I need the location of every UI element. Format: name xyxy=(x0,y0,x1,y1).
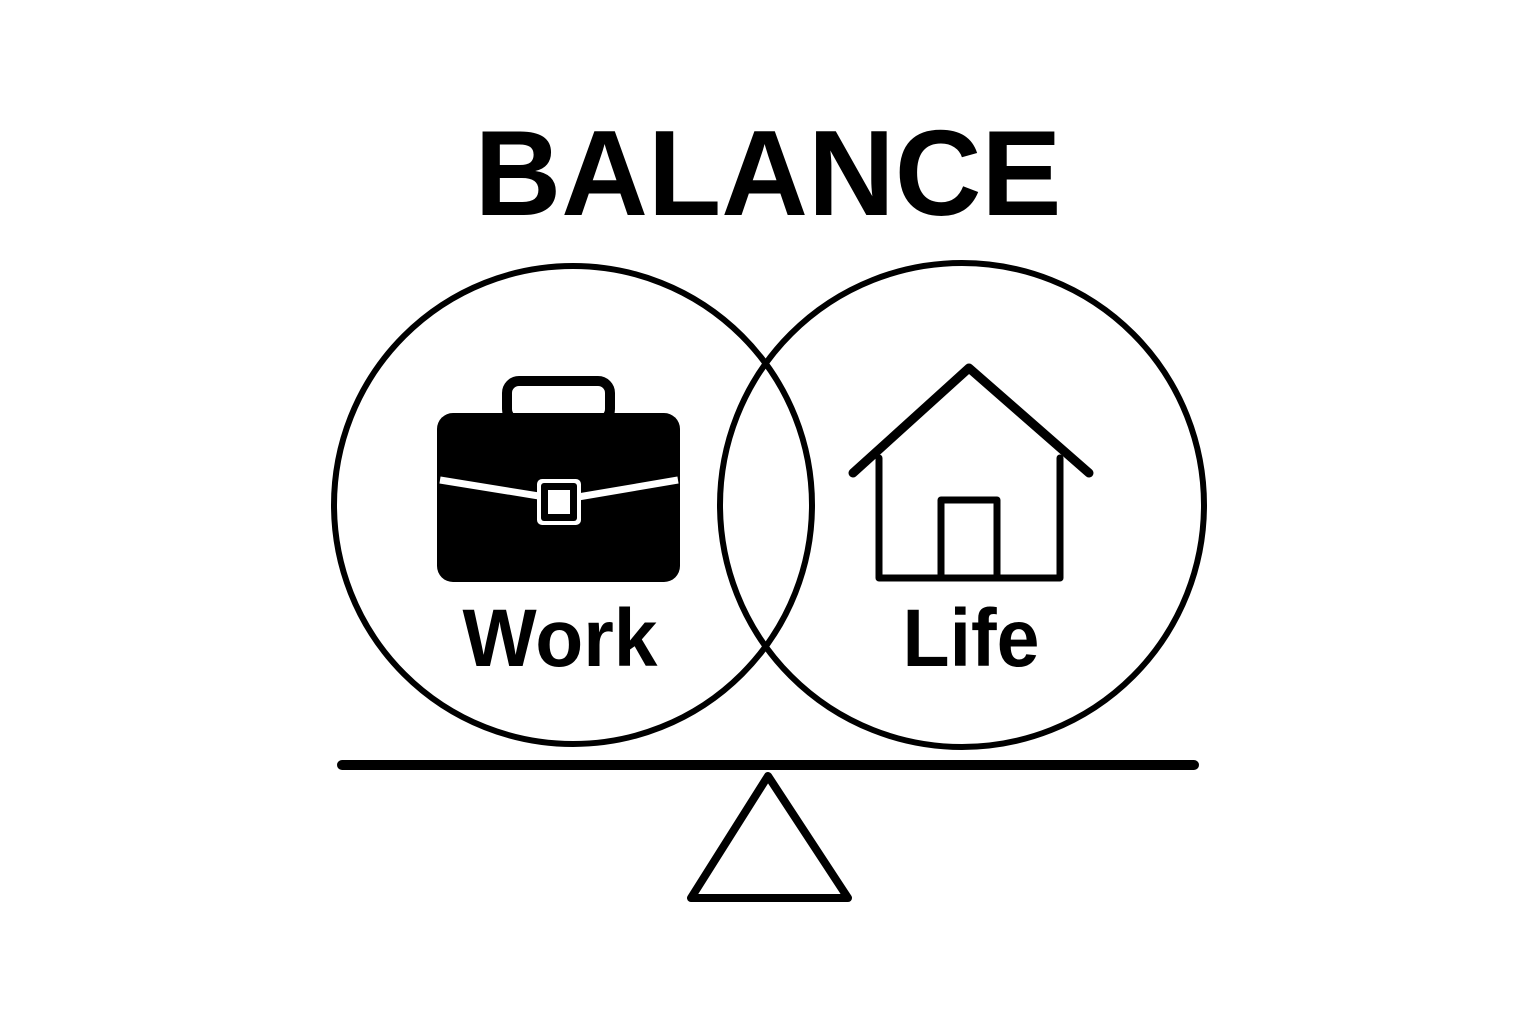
label: Work: Work xyxy=(462,593,658,684)
icon: briefcase xyxy=(437,381,680,582)
circle: life xyxy=(720,263,1204,747)
label: Life: Life xyxy=(902,593,1040,684)
balance beam xyxy=(342,760,1194,770)
icon: house xyxy=(853,368,1089,578)
fulcrum triangle xyxy=(691,776,848,898)
title: BALANCE xyxy=(474,105,1062,241)
circle: work xyxy=(334,266,812,744)
